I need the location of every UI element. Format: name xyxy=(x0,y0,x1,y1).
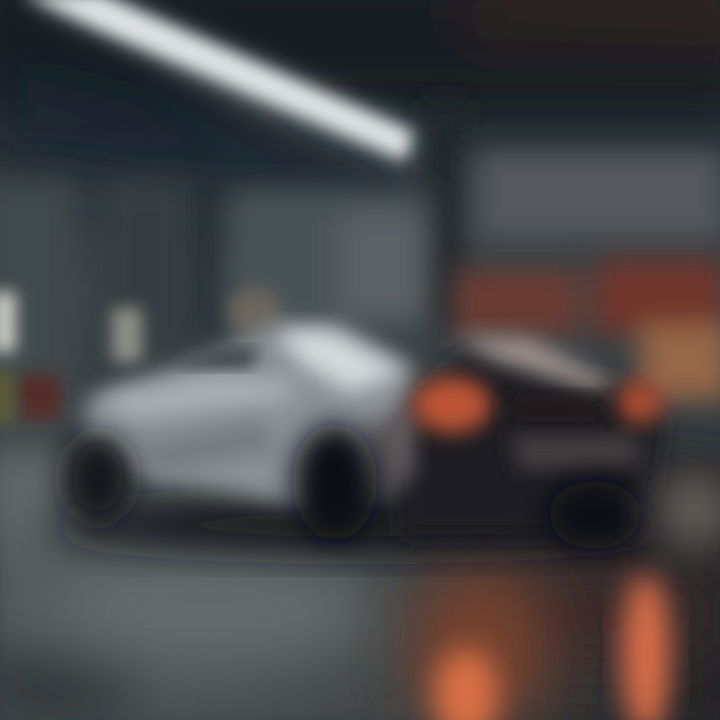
rear bumper xyxy=(510,435,640,470)
front wheel xyxy=(64,434,132,522)
left tail light xyxy=(412,377,492,433)
ceiling shadow xyxy=(0,0,720,220)
bonnet highlight xyxy=(95,378,295,418)
right floor patch xyxy=(655,470,720,550)
floor xyxy=(0,450,720,720)
car shadow xyxy=(50,499,670,551)
roof highlight xyxy=(275,330,405,392)
wall panels xyxy=(0,100,720,430)
car xyxy=(50,325,670,551)
rear wheel xyxy=(293,424,377,540)
car rear dark body xyxy=(390,350,665,535)
car white body xyxy=(85,325,415,505)
red wall at right xyxy=(455,260,720,400)
right tail light xyxy=(616,380,664,424)
rear centre dark xyxy=(505,395,605,423)
windscreen xyxy=(170,348,262,368)
rear roof panel xyxy=(455,335,620,392)
door shadow xyxy=(130,420,280,475)
orange floor reflections xyxy=(410,565,670,720)
rear quarter panel xyxy=(365,405,415,505)
far rear wheel xyxy=(549,481,641,549)
left windows and red glow xyxy=(0,288,281,425)
ceiling light strip xyxy=(20,0,415,165)
floor highlights xyxy=(0,450,720,720)
